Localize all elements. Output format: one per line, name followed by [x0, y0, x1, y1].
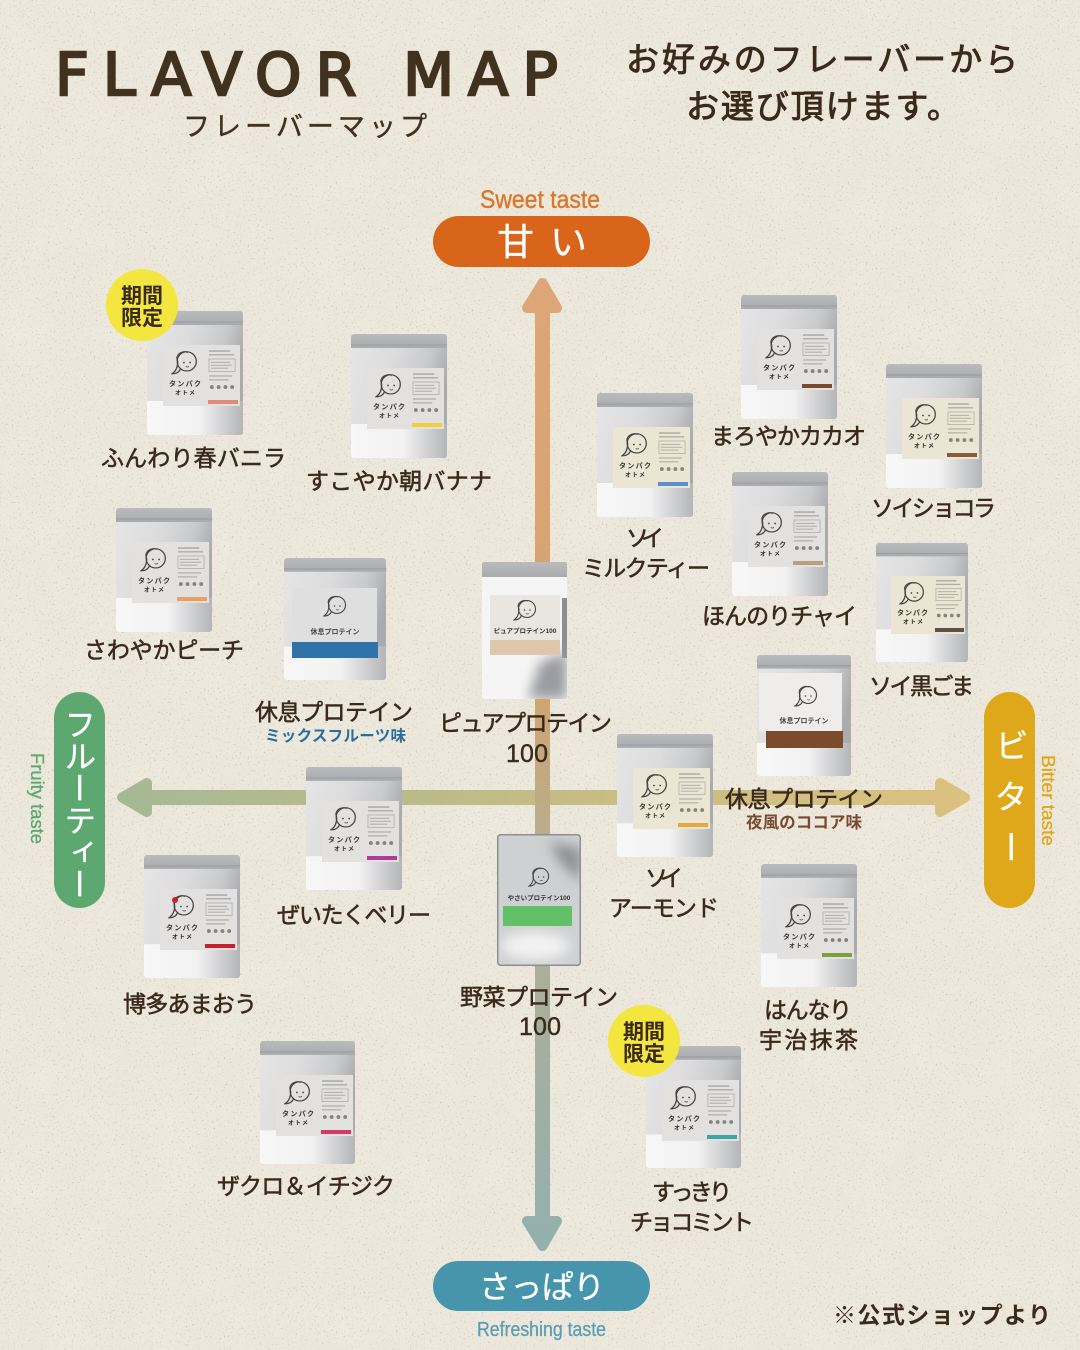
pack: オトメ — [172, 934, 192, 941]
pack: タンパク — [373, 402, 405, 411]
english label: Bitter taste: Bitter taste — [1038, 755, 1058, 846]
label: 休息プロテイン — [255, 699, 413, 725]
pack: 休息プロテイン — [310, 627, 360, 636]
pack — [646, 1046, 741, 1168]
title: FLAVOR MAP: FLAVOR MAP — [55, 40, 558, 109]
heading line 1: お好みのフレーバーから — [626, 41, 1018, 78]
axis label: fruity — [27, 692, 105, 908]
label line 1: ソイ — [626, 525, 664, 551]
label: ソイショコラ — [871, 495, 996, 521]
product: 休息プロテイン 夜風のココア味 — [725, 655, 883, 832]
pack: やさいプロテイン100 — [508, 893, 571, 902]
label: すこやか朝バナナ — [306, 468, 492, 494]
title — [55, 40, 558, 142]
badge: 期間限定: 限定 — [121, 307, 163, 330]
heading copy — [626, 41, 1018, 125]
product: さわやかピーチ — [84, 508, 244, 663]
pack: タンパク — [328, 835, 360, 844]
product: 野菜プロテイン100 — [460, 834, 618, 1041]
badge: 期間限定: 期間 — [121, 285, 163, 308]
axis label: refreshing — [433, 1261, 650, 1341]
pack: 休息プロテイン — [780, 716, 828, 725]
label: ふんわり春バニラ — [101, 445, 286, 471]
label line 1: ソイ — [645, 865, 683, 891]
pack — [284, 558, 386, 680]
pack: タンパク — [282, 1109, 314, 1118]
pill: 甘い — [433, 216, 650, 267]
product: まろやかカカオ — [711, 295, 866, 449]
pack: ピュアプロテイン100 — [494, 627, 557, 635]
label: 休息プロテイン — [725, 786, 883, 812]
badge: 期間限定 — [106, 269, 178, 341]
pack — [886, 364, 982, 488]
axis label: bitter — [984, 692, 1058, 908]
pack: タンパク — [908, 432, 940, 441]
pack — [351, 334, 447, 458]
product: ソイアーモンド — [609, 734, 719, 921]
pack: オトメ — [625, 472, 645, 479]
pack: タンパク — [763, 363, 795, 372]
pack: タンパク — [169, 379, 201, 388]
english label: Fruity taste: Fruity taste — [27, 753, 47, 844]
label line 1: すっきり — [652, 1179, 732, 1205]
pill text: フルーティー: フルーティー — [60, 708, 96, 900]
pill: フルーティー — [54, 692, 105, 908]
pack: オトメ — [144, 587, 164, 594]
product: ソイミルクティー — [582, 393, 710, 581]
pack: タンパク — [668, 1114, 700, 1123]
product: ピュアプロテイン100 — [439, 562, 612, 768]
product: すこやか朝バナナ — [306, 334, 492, 494]
pack — [306, 767, 402, 890]
sub label: 夜風のココア味 — [746, 813, 862, 832]
badge: 期間限定 — [608, 1005, 680, 1077]
pack — [147, 311, 243, 435]
pack — [617, 734, 713, 857]
pack — [482, 562, 567, 699]
pack: オトメ — [288, 1120, 308, 1127]
pack — [260, 1041, 355, 1164]
label line 1: 野菜プロテイン — [460, 984, 618, 1010]
pack: タンパク — [138, 576, 170, 585]
pack — [497, 834, 581, 966]
label line 1: ピュアプロテイン — [439, 710, 612, 736]
label line 1: はんなり — [764, 997, 852, 1023]
pill: ビター — [984, 692, 1035, 908]
heading line 2: お選び頂けます。 — [686, 88, 960, 125]
arrow: vertical axis sweet to refreshing — [527, 283, 557, 1246]
arrow: horizontal axis fruity to bitter — [122, 783, 965, 812]
axis label: sweet — [433, 186, 650, 267]
pill text: 甘い: 甘い — [497, 222, 587, 263]
label: ぜいたくベリー — [277, 902, 431, 928]
product: すっきりチョコミント — [630, 1046, 754, 1235]
badge: 期間限定: 期間 — [623, 1021, 665, 1044]
product: ザクロ&イチジク — [217, 1041, 395, 1199]
label line 2: 100 — [506, 740, 548, 768]
pack: オトメ — [379, 413, 399, 420]
pack: タンパク — [783, 932, 815, 941]
label: ほんのりチャイ — [702, 603, 857, 629]
pack — [597, 393, 693, 517]
sub label: ミックスフルーツ味 — [265, 727, 406, 745]
product: ぜいたくベリー — [277, 767, 431, 928]
pack: オトメ — [903, 619, 923, 626]
pack — [761, 864, 857, 987]
label line 2: チョコミント — [630, 1209, 754, 1235]
pill text: さっぱり: さっぱり — [479, 1269, 605, 1305]
pack — [116, 508, 212, 632]
product: はんなり宇治抹茶 — [759, 864, 858, 1053]
pack: オトメ — [175, 390, 195, 397]
product: ふんわり春バニラ — [101, 311, 286, 471]
pack: オトメ — [769, 374, 789, 381]
pack: オトメ — [789, 943, 809, 950]
pack — [876, 543, 968, 662]
subtitle: フレーバーマップ — [183, 112, 427, 142]
label line 2: アーモンド — [609, 895, 719, 921]
pack — [144, 855, 240, 978]
label line 2: ミルクティー — [582, 555, 710, 581]
pack — [757, 655, 851, 776]
label line 2: 100 — [519, 1013, 561, 1041]
product: ソイ黒ごま — [869, 543, 974, 699]
product: 休息プロテイン ミックスフルーツ味 — [255, 558, 413, 745]
pack: タンパク — [897, 608, 928, 617]
badge: 期間限定: 限定 — [623, 1043, 665, 1066]
label: ソイ黒ごま — [869, 673, 974, 699]
pack: オトメ — [760, 551, 780, 558]
pack: タンパク — [619, 461, 651, 470]
label line 2: 宇治抹茶 — [759, 1027, 858, 1053]
pill text: ビター: ビター — [989, 728, 1027, 881]
pack — [741, 295, 837, 419]
pack: オトメ — [914, 443, 934, 450]
label: まろやかカカオ — [711, 423, 866, 449]
pack: タンパク — [639, 802, 671, 811]
english label: Refreshing taste: Refreshing taste — [477, 1319, 606, 1341]
pack: タンパク — [754, 540, 786, 549]
pack: オトメ — [674, 1125, 694, 1132]
source note: ※公式ショップより — [833, 1302, 1051, 1328]
label: ザクロ＆イチジク — [217, 1173, 395, 1199]
pill: さっぱり — [433, 1261, 650, 1311]
pack: オトメ — [645, 813, 665, 820]
label: さわやかピーチ — [84, 637, 244, 663]
label: 博多あまおう — [123, 991, 257, 1017]
pack — [732, 472, 828, 596]
pack: オトメ — [334, 846, 354, 853]
product: 博多あまおう — [123, 855, 257, 1017]
product: ほんのりチャイ — [702, 472, 857, 629]
english label: Sweet taste: Sweet taste — [480, 186, 600, 214]
product: ソイショコラ — [871, 364, 996, 521]
pack: タンパク — [166, 923, 198, 932]
